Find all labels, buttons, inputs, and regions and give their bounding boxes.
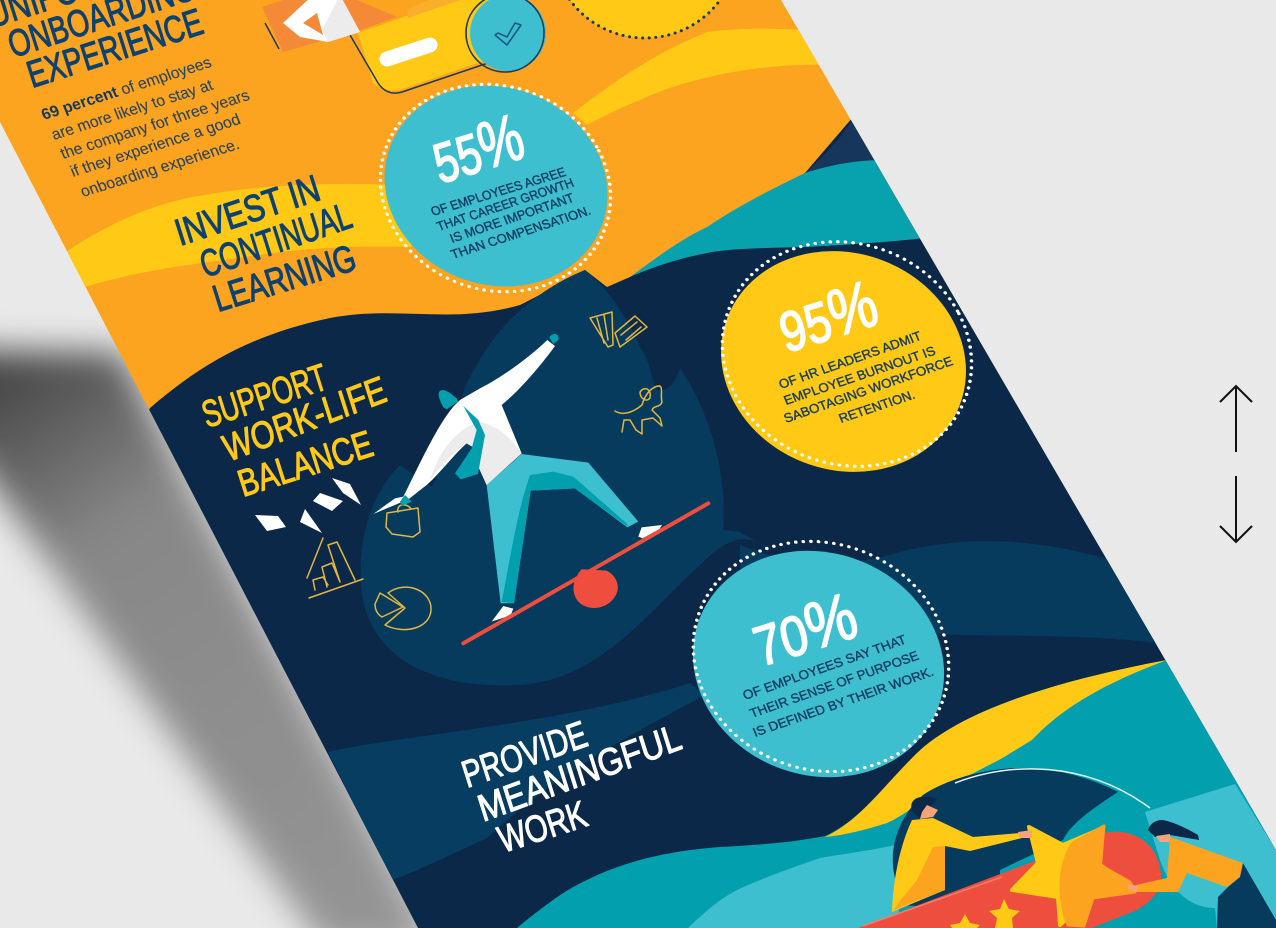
stat: 95%: 95%: [770, 265, 885, 367]
teal wave: [630, 160, 925, 277]
yellow wave upper right: [573, 29, 826, 125]
light teal panel at right: [1145, 784, 1276, 928]
icon: small star: [950, 914, 980, 928]
bar: [407, 0, 460, 18]
yellow wave bottom: [825, 660, 1167, 837]
stat: 95%: RETENTION.: [836, 387, 917, 426]
icon: small star: [989, 899, 1020, 928]
yellow wave behind learning heading: [66, 184, 412, 287]
stat: 95%: SABOTAGING WORKFORCE: [781, 353, 956, 426]
heading: provide meaningful work: MEANINGFUL: [473, 717, 686, 831]
bottom light teal wave: [688, 845, 900, 928]
icon: check badge: [470, 0, 546, 71]
lighter navy corner: [805, 120, 880, 173]
heading: invest in continual learning: CONTINUAL: [195, 195, 357, 287]
stat: 55%: THAN COMPENSATION.: [448, 203, 593, 262]
icon: bar chart: [307, 538, 363, 598]
text block: 69 percent: onboarding experience.: [78, 136, 242, 201]
heading: support work-life balance: SUPPORT: [197, 357, 332, 437]
heading: support work-life balance: WORK-LIFE: [218, 369, 391, 471]
shirt shade: [430, 422, 522, 485]
text block: 69 percent: 69 percent of employees: [39, 54, 214, 124]
mid blue band lower: [328, 683, 705, 880]
stat: 95%: OF HR LEADERS ADMIT: [776, 328, 924, 392]
heading: invest in continual learning: LEARNING: [208, 238, 361, 321]
flag: [262, 0, 397, 52]
icon: pie chart: [375, 587, 431, 630]
heading: onboarding: [0, 0, 205, 88]
heading: provide meaningful work: PROVIDE: [457, 714, 592, 797]
illustration: woman left: [892, 797, 1032, 912]
leg light: [487, 454, 638, 603]
stat: 55%: THAT CAREER GROWTH: [434, 175, 576, 234]
illustration: red card with stars: [858, 826, 1161, 928]
red ball: [573, 569, 618, 608]
stat: 55%: IS MORE IMPORTANT: [447, 190, 576, 246]
stat: 55%: 55%: [424, 98, 531, 198]
mid blue wave right: [740, 541, 1175, 645]
icon: large yellow star: [1010, 825, 1108, 928]
icon: flippers: [590, 312, 647, 347]
navy arc shape: [893, 768, 1118, 910]
hand: [400, 334, 559, 506]
plank: [463, 503, 708, 643]
white arc: [955, 769, 1150, 808]
tie: [455, 406, 485, 479]
icon: briefcase: [386, 505, 420, 537]
heading: provide meaningful work: [457, 714, 686, 862]
stat: 70%: 70%: [744, 577, 865, 681]
stat: 70%: [650, 508, 992, 810]
bottom teal wave: [517, 660, 1276, 928]
stat: 55%: [378, 82, 612, 294]
stat: 70%: IS DEFINED BY THEIR WORK.: [750, 664, 936, 740]
text block: 69 percent: the company for three years: [58, 87, 252, 163]
head: [439, 390, 458, 409]
stat: 55%: OF EMPLOYEES AGREE: [428, 164, 568, 219]
stat: 70%: OF EMPLOYEES SAY THAT: [740, 632, 908, 703]
stat: 95%: [680, 209, 1014, 504]
illustration: top card and flag: [262, 0, 546, 93]
stat: 95%: EMPLOYEE BURNOUT IS: [781, 343, 938, 408]
heading: provide meaningful work: WORK: [493, 794, 592, 862]
heading: invest in continual learning: [174, 174, 356, 312]
card: [358, 0, 489, 90]
white pill: [387, 45, 430, 59]
shoes: [492, 525, 662, 622]
panel: orange section background: [0, 0, 1000, 500]
text block: 69 percent: [39, 54, 252, 201]
icons: papers: [255, 478, 361, 533]
leg shade: [502, 472, 628, 603]
arrow up: [1220, 386, 1252, 452]
paper: [283, 0, 360, 42]
torso and arms: [373, 340, 555, 514]
heading: support work-life balance: BALANCE: [233, 423, 378, 506]
illustration: balancing man: [373, 334, 708, 643]
heading: invest in continual learning: INVEST IN: [170, 168, 325, 255]
text block: 69 percent: if they experience a good: [68, 111, 243, 181]
poster shadow: [0, 350, 440, 928]
blob behind figure: [361, 270, 770, 685]
icon: large orange star: [1061, 826, 1135, 926]
text block: 69 percent: are more likely to stay at: [49, 77, 216, 144]
icon: dog: [615, 386, 662, 434]
arrow down: [1220, 476, 1252, 542]
stat: 70%: THEIR SENSE OF PURPOSE: [747, 648, 921, 721]
heading: support work-life balance: [202, 363, 388, 497]
yellow disc at top: [568, 0, 720, 40]
illustration: woman right: [1128, 820, 1276, 928]
